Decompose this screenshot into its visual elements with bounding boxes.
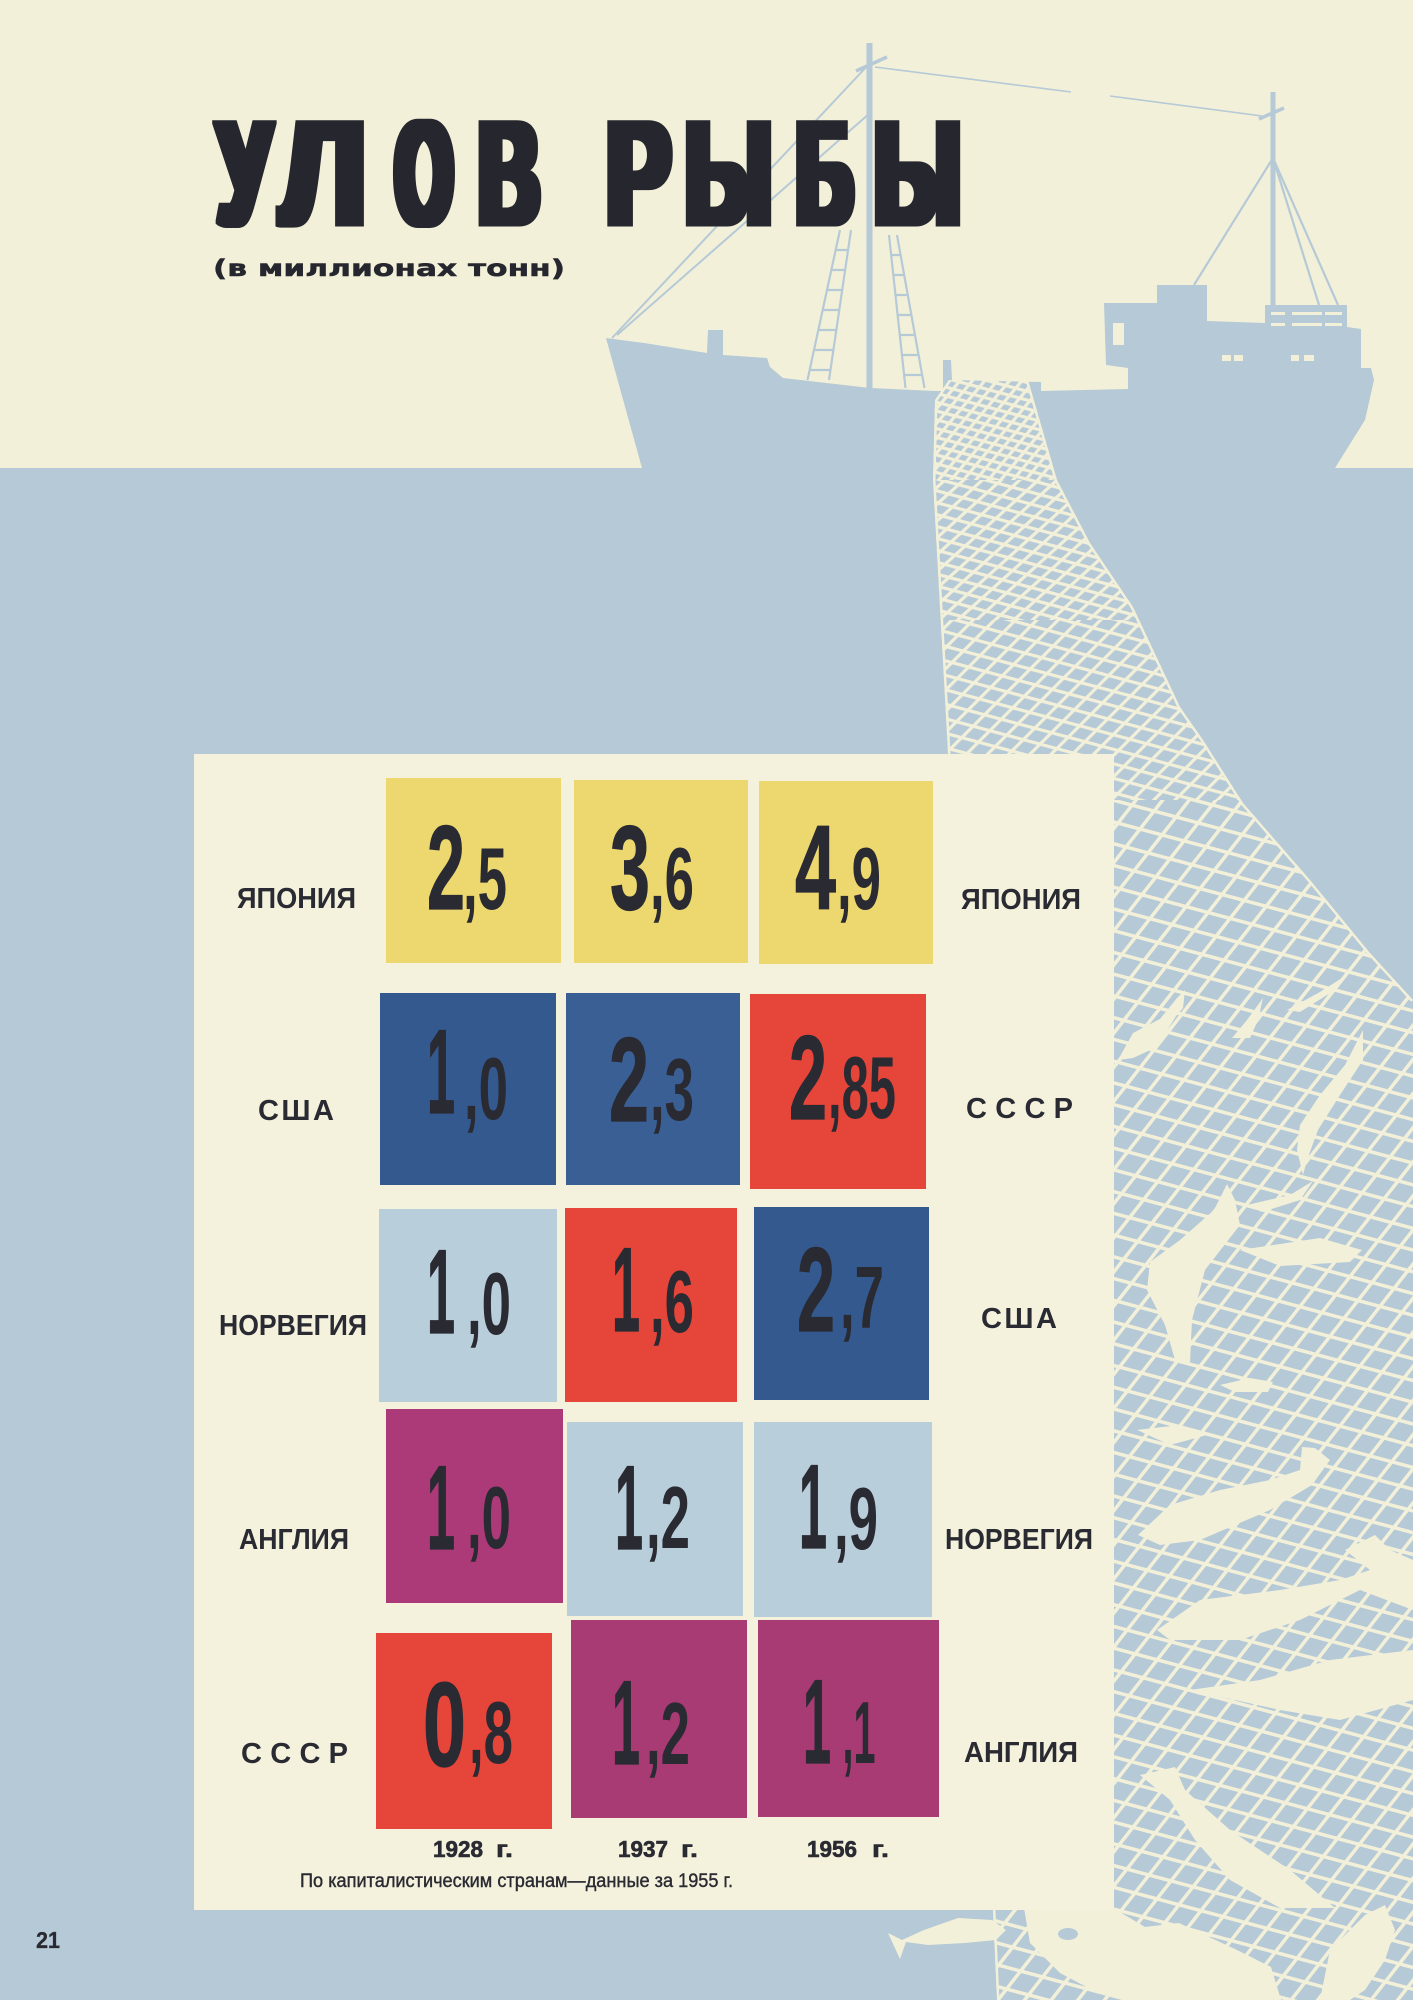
row labels: right column: ЯПОНИЯ [961,884,1081,916]
cell: СССР 1928: ,8 [469,1683,513,1782]
fishing net [900,380,1413,2000]
year labels: г. [872,1836,889,1862]
cell: Норвегия 1956 [754,1422,932,1617]
cell: Англия 1937: 1 [612,1656,640,1790]
fish caught in the net [888,978,1413,2000]
row labels: left column: НОРВЕГИЯ [219,1310,367,1342]
row labels: right column: НОРВЕГИЯ [945,1524,1093,1556]
year labels [433,1836,889,1862]
cell: Япония 1956: ,9 [837,829,881,928]
cell: США 1937: ,3 [650,1040,694,1139]
cell: Норвегия 1928 [379,1209,557,1402]
cell: Япония 1937: 3 [610,801,650,935]
title: В [479,89,539,257]
footnote: По капиталистическим странам—данные за 1955 г. [300,1871,733,1892]
cell: Англия 1928: 1 [427,1441,455,1575]
row labels: right column: АНГЛИЯ [964,1737,1078,1769]
panel: data table [194,754,1114,1910]
cell: США 1928: 1 [427,1005,455,1139]
bridge window [1113,323,1124,345]
title: Ы [686,89,771,257]
year labels: г. [496,1836,513,1862]
cell: СССР 1928: 0 [423,1658,466,1792]
portholes [1222,355,1314,361]
cell: Норвегия 1928: 1 [427,1225,455,1359]
background: sea [0,468,1413,2000]
title: Ы [875,89,960,257]
cell: СССР 1956: ,85 [828,1038,896,1137]
cell: США 1937: 2 [609,1013,649,1147]
cell: Англия 1937 [571,1620,747,1818]
masts and rigging [612,43,1338,388]
ship silhouette [606,43,1374,468]
row labels: right column: СССР [966,1093,1073,1125]
cell: Англия 1928 [386,1409,563,1603]
row labels: left column: ЯПОНИЯ [237,883,356,915]
row labels: right column [945,884,1093,1769]
subtitle: (в миллионах тонн) [213,256,565,282]
cell: Норвегия 1956: 1 [799,1440,827,1574]
cell: США 1956 [754,1207,929,1400]
cell: СССР 1937 [565,1208,737,1402]
cell: Норвегия 1937: ,2 [646,1468,690,1567]
cell: Япония 1928: 2 [427,801,465,935]
cell: Япония 1956: 4 [795,801,836,935]
year labels: 1956 [807,1836,857,1862]
cell: Япония 1937: ,6 [650,829,694,928]
cell: СССР 1928 [376,1633,552,1829]
cell: США 1956: 2 [797,1223,835,1357]
cell: Япония 1928: ,5 [463,829,507,928]
cell: СССР 1937: ,6 [650,1252,694,1351]
row labels: left column: СССР [241,1738,348,1770]
ladders [808,230,924,388]
year labels: 1937 [618,1836,668,1862]
cell: СССР 1956 [750,994,926,1189]
cell: Норвегия 1928: ,0 [467,1254,511,1353]
cell: Англия 1937: ,2 [646,1684,690,1783]
cell: США 1937 [566,993,740,1185]
year labels: г. [681,1836,698,1862]
page number: 21 [36,1927,60,1953]
cell: Англия 1956 [758,1620,939,1817]
row labels: left column: США [258,1095,334,1127]
cell: Норвегия 1937 [567,1422,743,1616]
title: У [218,89,271,257]
cell: СССР 1937: 1 [612,1223,640,1357]
cell: Япония 1956 [759,781,933,964]
row labels: left column: АНГЛИЯ [239,1524,349,1556]
cell: США 1928 [380,993,556,1185]
cell: Норвегия 1956: ,9 [834,1469,878,1568]
deck railing [1271,312,1342,326]
cell: США 1956: ,7 [840,1248,884,1347]
cell: Япония 1937 [574,780,748,963]
cell: Норвегия 1937: 1 [615,1441,643,1575]
title: Б [797,89,852,257]
cell: Англия 1956: 1 [803,1655,831,1789]
cell: Англия 1928: ,0 [467,1468,511,1567]
title: Р [607,89,670,257]
year labels: 1928 [433,1836,483,1862]
cell: США 1928: ,0 [464,1039,508,1138]
row labels: right column: США [981,1303,1057,1335]
hull and superstructure [606,285,1374,468]
cell: Англия 1956: ,1 [842,1683,876,1782]
row labels: left column [219,883,367,1770]
cell: Япония 1928 [386,778,561,963]
title: О [396,89,452,257]
title: Л [281,89,366,257]
cell: СССР 1956: 2 [789,1011,827,1145]
